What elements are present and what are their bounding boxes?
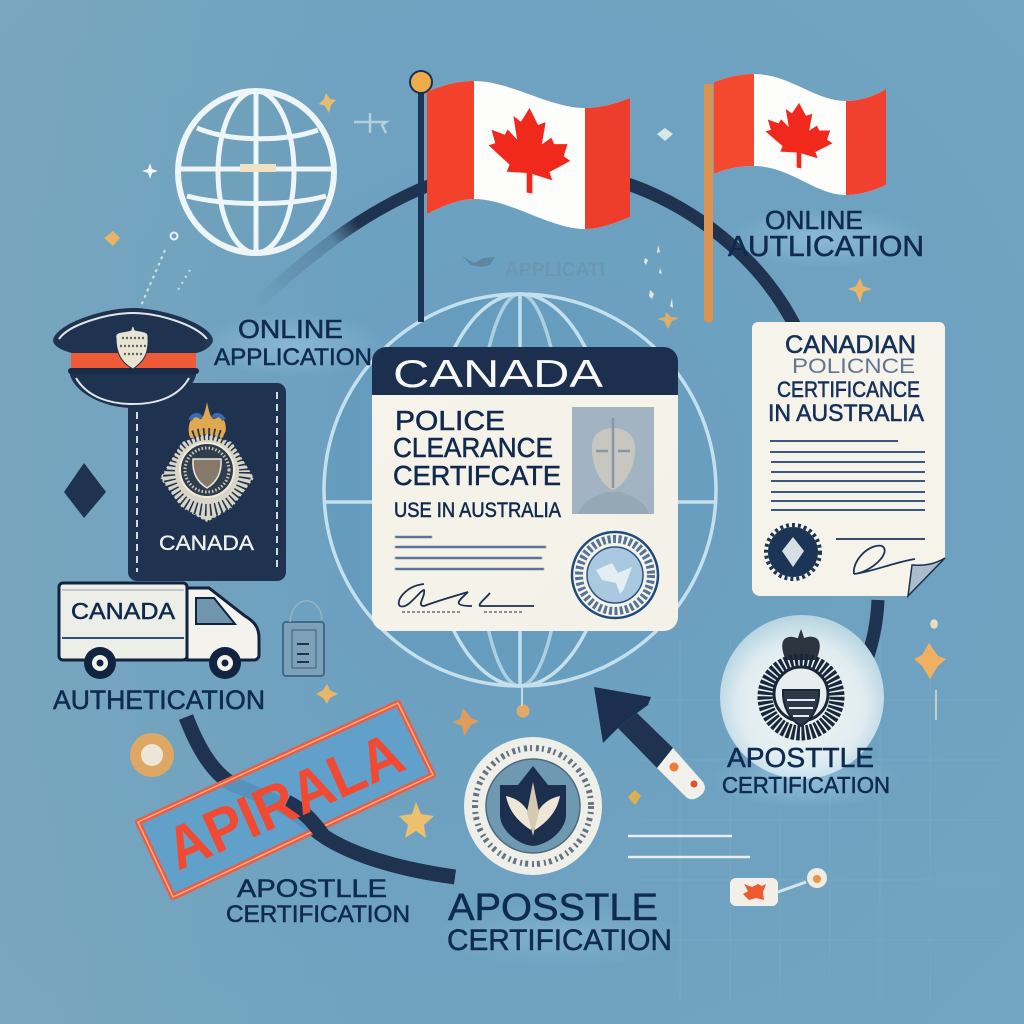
document title: CERTIFICANCE [777, 377, 920, 402]
pole: navy with gold ball [410, 71, 432, 322]
certificate title: CERTIFCATE [393, 460, 561, 491]
label: authentication: AUTHETICATION [53, 685, 265, 715]
central globe [324, 294, 717, 686]
label: apostille centre: APOSSTLE [448, 887, 658, 929]
flag: right Canadian flag [704, 74, 886, 322]
official crest medallion [720, 615, 884, 779]
label: online autlication: ONLINE [765, 205, 863, 235]
label: apostille right [710, 742, 900, 808]
police cap [53, 308, 213, 408]
document title [768, 331, 924, 427]
clipboard icon [283, 601, 324, 676]
flag cloth [714, 74, 886, 195]
document title: POLICNCE [792, 355, 915, 378]
document text lines [770, 441, 925, 510]
document title: CANADIAN [785, 331, 916, 359]
document: Canadian certificate [752, 322, 945, 596]
label: apostille left: CERTIFICATION [226, 901, 410, 928]
document signature [836, 539, 925, 574]
stamp: APIRALA [156, 719, 414, 883]
connecting arc: lower left [186, 717, 455, 877]
label: online autlication: AUTLICATION [728, 231, 924, 263]
document title: IN AUSTRALIA [768, 400, 924, 427]
label: online application: ONLINE [238, 314, 343, 344]
certificate title [393, 405, 561, 522]
delivery truck [59, 583, 259, 679]
card header: CANADA [393, 353, 603, 396]
diamond icon [64, 463, 106, 518]
label: apostille right: CERTIFICATION [722, 772, 890, 798]
passport [128, 383, 286, 581]
label: apostille right: APOSTTLE [727, 742, 874, 773]
label: apostille left: APOSTLLE [237, 875, 387, 903]
flag: left Canadian flag [410, 71, 630, 322]
card header [372, 347, 678, 396]
apostille seal [464, 737, 602, 875]
document seal [766, 525, 820, 579]
data lines [395, 537, 546, 569]
label: apostille centre [435, 887, 685, 967]
ID photo [572, 407, 654, 514]
connecting arc: right path [625, 183, 878, 662]
central certificate card [372, 347, 678, 631]
dark crest [765, 629, 837, 733]
decorative globe: top left [178, 91, 334, 253]
connecting arc: upper path [255, 185, 430, 305]
arrow [594, 687, 705, 799]
small tag icon [730, 868, 827, 906]
signatures [399, 584, 534, 612]
certificate title: POLICE [395, 405, 505, 436]
white note lines [628, 836, 750, 857]
pole: orange [704, 84, 713, 322]
certificate title: USE IN AUSTRALIA [394, 499, 561, 522]
label: online application: APPLICATION [214, 344, 372, 371]
faint ghost label: APPLICATI [505, 260, 605, 281]
passport: CANADA [159, 532, 254, 555]
faint ghost label [462, 256, 605, 281]
passport crest [160, 402, 254, 522]
label: apostille centre: CERTIFICATION [447, 924, 672, 957]
certificate title: CLEARANCE [393, 432, 553, 463]
flag cloth [427, 81, 630, 229]
round seal [572, 532, 658, 618]
delivery truck: CANADA [71, 598, 176, 624]
label: online application [200, 313, 384, 377]
label: online autlication [725, 205, 925, 268]
label: apostille left [226, 875, 410, 928]
sparkles and small markers [104, 93, 946, 838]
